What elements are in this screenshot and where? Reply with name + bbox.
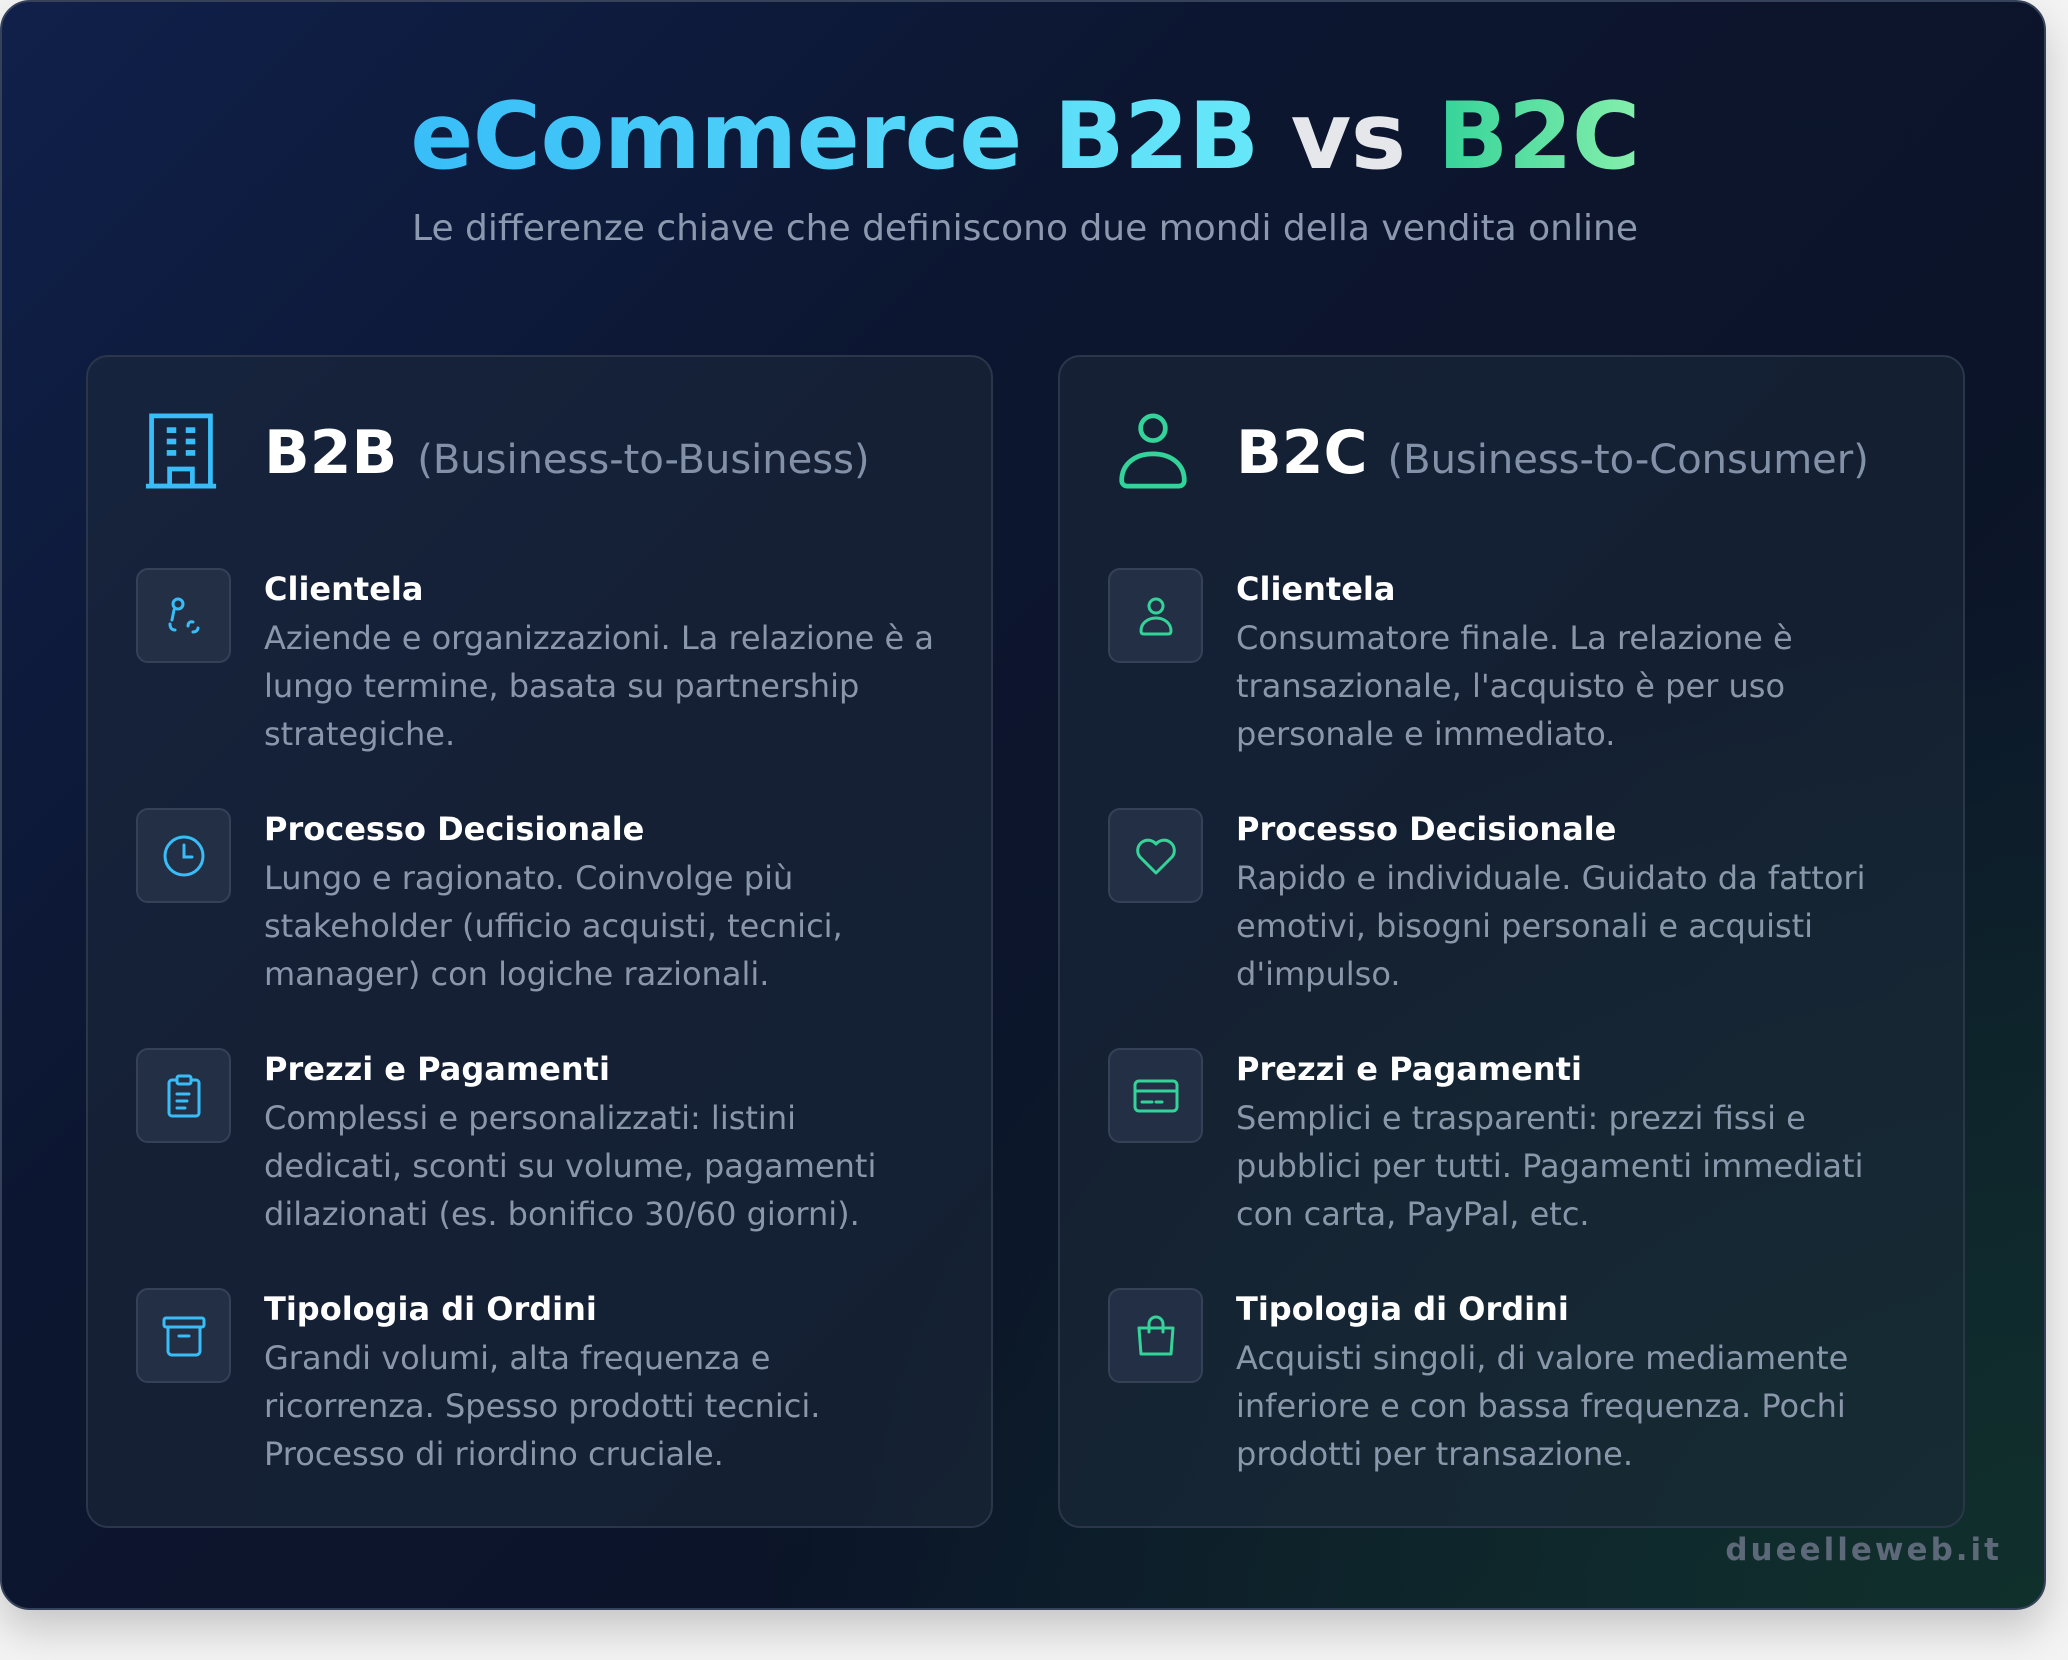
- item: Prezzi e Pagamenti: [1108, 1048, 1863, 1233]
- icon: person: [1119, 414, 1187, 488]
- watermark: dueelleweb.it: [1725, 1532, 2002, 1568]
- item: Clientela: [136, 568, 934, 753]
- icon: building: [146, 414, 216, 488]
- item: Prezzi e Pagamenti: [136, 1048, 876, 1233]
- heading: B2B: B2B (Business-to-Business): [264, 418, 870, 488]
- title: eCommerce B2B vs B2C: [410, 82, 1640, 190]
- item: Prezzi e Pagamenti: Prezzi e Pagamenti: [264, 1050, 610, 1088]
- subtitle: Le differenze chiave che definiscono due mondi della vendita online: [412, 208, 1638, 249]
- item: Clientela: Clientela: [264, 570, 423, 608]
- item: Processo Decisionale: [136, 808, 843, 993]
- item: Clientela: [1108, 568, 1793, 753]
- item: Tipologia di Ordini: [1108, 1288, 1848, 1473]
- item: Prezzi e Pagamenti: Prezzi e Pagamenti: [1236, 1050, 1582, 1088]
- item: Tipologia di Ordini: [136, 1288, 820, 1473]
- heading: B2C: B2C (Business-to-Consumer): [1236, 418, 1869, 488]
- item: Processo Decisionale: Processo Decisionale: [1236, 810, 1616, 848]
- panel: B2C: [1058, 355, 1965, 1528]
- item: Clientela: Aziende e organizzazioni. La relazione è a lungo termine, basata su partnership strategiche.: [264, 619, 934, 753]
- item: Tipologia di Ordini: Tipologia di Ordini: [264, 1290, 597, 1328]
- item: Processo Decisionale: Processo Decisionale: [264, 810, 644, 848]
- item: Processo Decisionale: Lungo e ragionato. Coinvolge più stakeholder (ufficio acquisti, tecnici, manager) con logiche razionali.: [264, 859, 843, 993]
- item: Tipologia di Ordini: Acquisti singoli, di valore mediamente inferiore e con bassa frequenza. Pochi prodotti per transazione.: [1236, 1339, 1848, 1473]
- item: Clientela: Clientela: [1236, 570, 1395, 608]
- item: Clientela: Consumatore finale. La relazione è transazionale, l'acquisto è per uso personale e immediato.: [1236, 619, 1793, 753]
- item: Tipologia di Ordini: Tipologia di Ordini: [1236, 1290, 1569, 1328]
- item: Prezzi e Pagamenti: Complessi e personalizzati: listini dedicati, sconti su volume, pagamenti dilazionati (es. bonifico 30/60 giorni).: [264, 1099, 876, 1233]
- item: Processo Decisionale: Rapido e individuale. Guidato da fattori emotivi, bisogni personali e acquisti d'impulso.: [1236, 859, 1865, 993]
- item: Prezzi e Pagamenti: Semplici e trasparenti: prezzi fissi e pubblici per tutti. Pagamenti immediati con carta, PayPal, etc.: [1236, 1099, 1863, 1233]
- item: Tipologia di Ordini: Grandi volumi, alta frequenza e ricorrenza. Spesso prodotti tecnici. Processo di riordino cruciale.: [264, 1339, 820, 1473]
- item: Processo Decisionale: [1108, 808, 1865, 993]
- panel: B2B: [86, 355, 993, 1528]
